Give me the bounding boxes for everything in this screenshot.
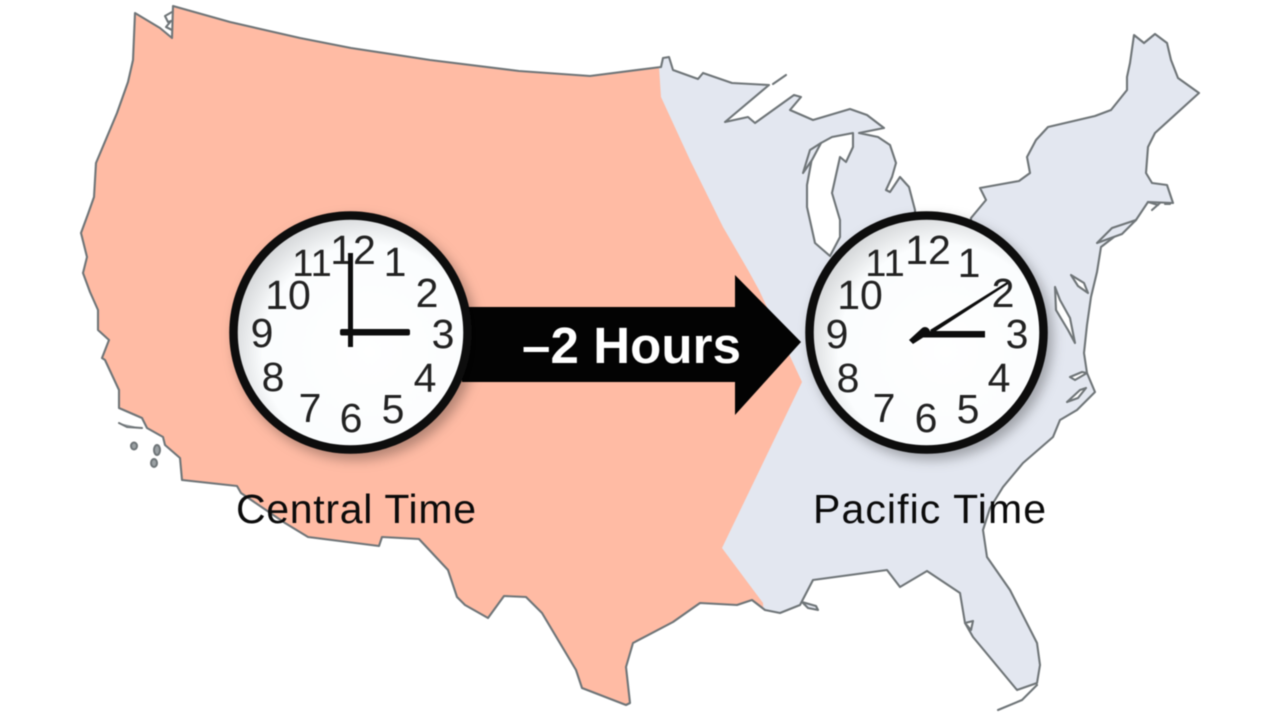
clock numerals: 7 xyxy=(873,385,895,431)
Pamlico Sound xyxy=(1067,372,1087,402)
clock numerals: 3 xyxy=(1006,311,1028,357)
clock numerals: 1 xyxy=(384,239,406,285)
clock numerals: 6 xyxy=(915,395,937,441)
map: western region of the United States xyxy=(82,7,802,704)
Channel Islands xyxy=(119,423,160,467)
Tampa Bay xyxy=(965,621,973,630)
clock: Central Time xyxy=(234,216,468,450)
clock numerals: 2 xyxy=(992,270,1014,316)
clock numerals: 5 xyxy=(382,386,404,432)
clock numerals: 4 xyxy=(414,355,436,401)
clock numerals: 2 xyxy=(416,270,438,316)
arrow label: –2 Hours xyxy=(522,317,741,374)
clock numerals xyxy=(826,227,1028,441)
clock numerals: 12 xyxy=(330,227,376,273)
clock numerals: 5 xyxy=(957,386,979,432)
Green Bay xyxy=(803,143,821,173)
clock numerals: 11 xyxy=(292,243,332,285)
label: Central Time: Central Time xyxy=(236,486,476,532)
clock numerals: 10 xyxy=(265,272,311,318)
clock hands xyxy=(909,282,1008,344)
clock numerals: 11 xyxy=(865,243,905,285)
clock numerals: 9 xyxy=(251,310,273,356)
Lake Superior island xyxy=(773,75,786,84)
Chesapeake Bay xyxy=(1055,287,1075,343)
clock numerals: 12 xyxy=(905,227,951,273)
Lake Michigan xyxy=(807,133,853,256)
Delaware Bay xyxy=(1071,275,1088,293)
clock numerals: 6 xyxy=(340,395,362,441)
label: Pacific Time: Pacific Time xyxy=(813,486,1046,532)
Puget Sound xyxy=(165,12,172,30)
Florida Keys xyxy=(998,685,1037,710)
Cape Cod islands xyxy=(1148,202,1170,210)
clock numerals: 10 xyxy=(837,272,883,318)
clock numerals: 9 xyxy=(826,311,848,357)
clock hands xyxy=(340,253,410,347)
clock numerals: 1 xyxy=(958,240,980,286)
clock numerals: 8 xyxy=(837,355,859,401)
clock: Pacific Time xyxy=(810,216,1044,450)
clock numerals xyxy=(251,227,454,441)
clock numerals: 3 xyxy=(432,311,454,357)
clock numerals: 7 xyxy=(299,385,321,431)
arrow: minus two hours xyxy=(462,275,801,415)
Long Island xyxy=(1097,220,1136,243)
clock numerals: 4 xyxy=(988,355,1010,401)
clock numerals: 8 xyxy=(262,354,284,400)
Gulf island xyxy=(802,602,818,610)
